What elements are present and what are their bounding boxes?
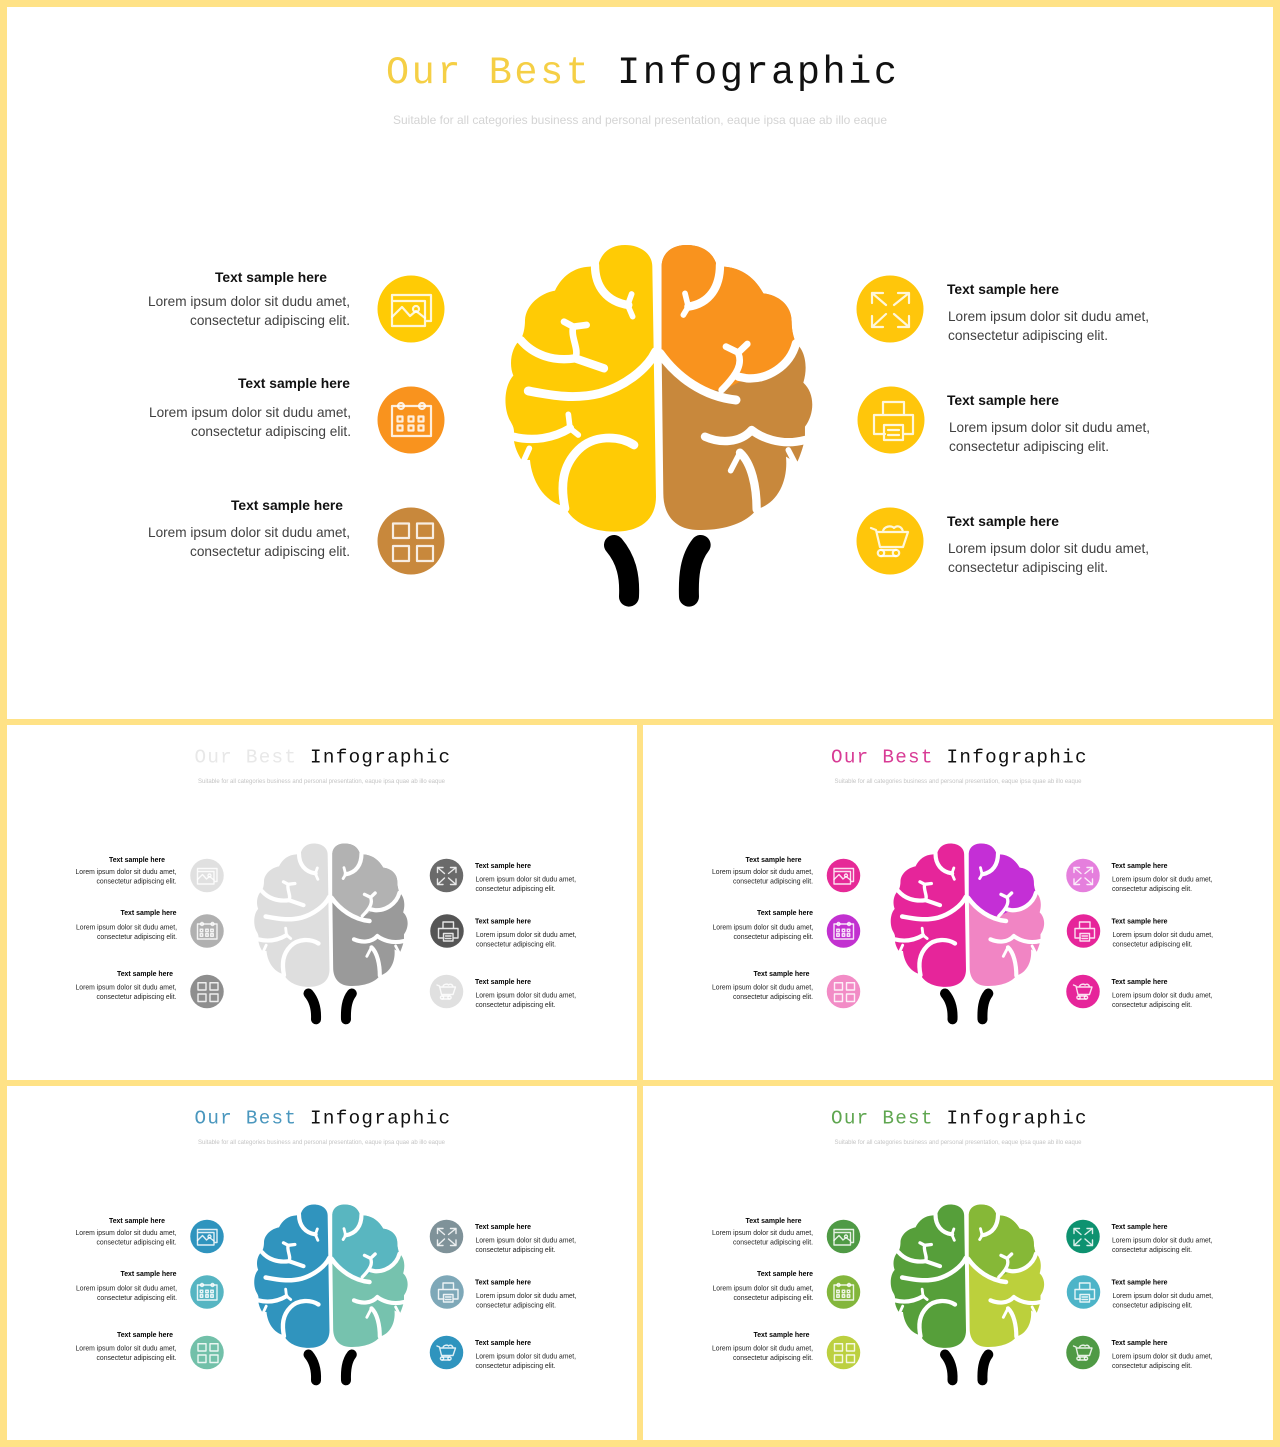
text block: right 1: Lorem ipsum dolor sit dudu amet, — [1112, 876, 1213, 884]
text block: right 1: consectetur adipiscing elit. — [1112, 886, 1192, 893]
text block: left 1: consectetur adipiscing elit. — [733, 878, 813, 886]
text block: right 2: Text sample here — [1112, 1280, 1168, 1286]
text block: right 3: Text sample here — [1112, 979, 1168, 986]
text block: right 1: consectetur adipiscing elit. — [1112, 1247, 1192, 1254]
text block: right 2: Lorem ipsum dolor sit dudu amet, — [1112, 932, 1213, 939]
icon: printer — [858, 386, 924, 454]
text block: left 1 — [712, 857, 813, 886]
icon: cart — [856, 508, 924, 574]
icon: cart — [1066, 1336, 1100, 1369]
text block: left 3: Lorem ipsum dolor sit dudu amet, — [712, 1346, 813, 1352]
brain illustration — [254, 1204, 408, 1380]
text block: left 3: consectetur adipiscing elit. — [733, 994, 813, 1001]
panel: blue slide — [7, 1086, 637, 1440]
text block: right 3: consectetur adipiscing elit. — [1112, 1002, 1192, 1009]
text block: left 1: Lorem ipsum dolor sit dudu amet, — [76, 1230, 177, 1237]
icon: cart — [430, 1336, 463, 1369]
text block: left 3: Lorem ipsum dolor sit dudu amet, — [76, 984, 177, 992]
text block: right 3 — [475, 979, 576, 1009]
text block: right 2 — [475, 918, 577, 948]
text block: right 3: consectetur adipiscing elit. — [476, 1363, 556, 1370]
text block: right 1: Lorem ipsum dolor sit dudu amet, — [1112, 1238, 1213, 1244]
icon: image — [190, 1220, 224, 1253]
text block: left 2 — [76, 910, 177, 941]
brain illustration — [891, 1204, 1044, 1380]
text block: right 2: Text sample here — [947, 392, 1059, 408]
subtitle: Suitable for all categories business and personal presentation, eaque ipsa quae ab illo eaque — [393, 113, 887, 127]
text block: right 3: Lorem ipsum dolor sit dudu amet, — [948, 540, 1149, 556]
text block: right 2: consectetur adipiscing elit. — [476, 942, 556, 948]
icon: calendar — [378, 386, 444, 454]
title: Our Best Infographic — [194, 1108, 450, 1130]
text block: right 1: Text sample here — [1112, 1224, 1168, 1231]
text block: left 1: Text sample here — [746, 1218, 802, 1225]
text block: left 3: consectetur adipiscing elit. — [733, 1355, 813, 1362]
text block: left 3: consectetur adipiscing elit. — [96, 994, 177, 1001]
icon: image — [827, 1220, 860, 1253]
text block: right 3: Text sample here — [475, 979, 531, 986]
subtitle: Suitable for all categories business and personal presentation, eaque ipsa quae ab illo eaque — [834, 779, 1082, 785]
text block: left 2: Text sample here — [757, 910, 813, 917]
brain illustration — [891, 843, 1044, 1019]
text block: left 3 — [148, 497, 350, 559]
brain illustration — [254, 843, 408, 1019]
text block: left 3: consectetur adipiscing elit. — [190, 543, 350, 559]
text block: right 1: Text sample here — [475, 1224, 531, 1231]
text block: right 2: Text sample here — [1112, 918, 1168, 926]
icon: image — [378, 276, 444, 342]
text block: left 3 — [712, 971, 813, 1001]
panel: pink slide — [643, 725, 1273, 1080]
icon: grid — [190, 1336, 224, 1369]
icon: calendar — [827, 1275, 860, 1309]
text block: right 2: consectetur adipiscing elit. — [949, 438, 1109, 454]
text block: left 2: consectetur adipiscing elit. — [191, 423, 351, 439]
text block: right 3: Lorem ipsum dolor sit dudu amet, — [476, 992, 576, 1000]
text block: right 1: consectetur adipiscing elit. — [948, 327, 1108, 343]
title: Our Best Infographic — [194, 746, 450, 768]
subtitle: Suitable for all categories business and personal presentation, eaque ipsa quae ab illo eaque — [198, 1140, 446, 1146]
text block: left 2: consectetur adipiscing elit. — [97, 934, 177, 941]
text block: left 3: Text sample here — [754, 1332, 810, 1339]
icon: calendar — [190, 914, 224, 948]
text block: left 1: Text sample here — [109, 857, 165, 864]
icon: cart — [1066, 975, 1100, 1008]
text block: left 3: Lorem ipsum dolor sit dudu amet, — [712, 984, 813, 992]
text block: right 2: Lorem ipsum dolor sit dudu amet, — [949, 419, 1150, 435]
icon: grid — [378, 508, 444, 574]
text block: left 3: Lorem ipsum dolor sit dudu amet, — [76, 1346, 177, 1352]
text block: left 1: Lorem ipsum dolor sit dudu amet, — [76, 869, 177, 876]
text block: left 3: Text sample here — [754, 971, 810, 978]
text block: left 2: Lorem ipsum dolor sit dudu amet, — [712, 1286, 814, 1292]
icon: expand — [430, 859, 463, 892]
panel: green slide — [643, 1086, 1273, 1440]
text block: right 1: Lorem ipsum dolor sit dudu amet, — [948, 308, 1149, 324]
text block: left 2 — [712, 1271, 814, 1302]
icon: image — [827, 859, 860, 892]
text block: right 1 — [1112, 863, 1213, 893]
text block: left 2: consectetur adipiscing elit. — [97, 1295, 177, 1302]
icon: printer — [1067, 914, 1100, 948]
text block: right 3: Lorem ipsum dolor sit dudu amet, — [476, 1354, 576, 1360]
icon: grid — [827, 975, 860, 1008]
text block: left 3 — [76, 1332, 177, 1362]
text block: left 1: Lorem ipsum dolor sit dudu amet, — [148, 293, 350, 309]
panel: main yellow slide — [7, 7, 1273, 719]
text block: right 2 — [1112, 1280, 1213, 1310]
text block: right 3: Text sample here — [947, 513, 1059, 529]
title: Our Best Infographic — [831, 746, 1086, 768]
text block: left 1: consectetur adipiscing elit. — [733, 1240, 813, 1246]
text block: left 3: consectetur adipiscing elit. — [96, 1355, 177, 1362]
text block: left 2: Lorem ipsum dolor sit dudu amet, — [76, 1286, 177, 1292]
text block: left 1: Text sample here — [746, 857, 802, 864]
title: Our Best Infographic — [386, 51, 897, 95]
text block: right 3 — [1112, 979, 1213, 1009]
subtitle: Suitable for all categories business and personal presentation, eaque ipsa quae ab illo eaque — [834, 1140, 1082, 1146]
text block: left 2: Text sample here — [757, 1271, 813, 1278]
text block: right 2: consectetur adipiscing elit. — [1112, 1302, 1193, 1310]
text block: left 3: Text sample here — [231, 497, 343, 513]
text block: right 1: consectetur adipiscing elit. — [476, 1247, 556, 1254]
icon: printer — [430, 914, 464, 948]
text block: right 2: Text sample here — [475, 1280, 531, 1286]
text block: right 2: consectetur adipiscing elit. — [476, 1302, 556, 1310]
subtitle: Suitable for all categories business and personal presentation, eaque ipsa quae ab illo eaque — [198, 779, 446, 785]
text block: left 2: consectetur adipiscing elit. — [734, 1295, 814, 1302]
text block: left 1: consectetur adipiscing elit. — [96, 878, 177, 886]
text block: right 2: consectetur adipiscing elit. — [1112, 942, 1193, 948]
icon: cart — [430, 975, 463, 1008]
text block: right 2 — [1112, 918, 1213, 948]
icon: image — [190, 859, 224, 892]
text block: right 3 — [947, 513, 1149, 575]
text block: right 3: Lorem ipsum dolor sit dudu amet, — [1112, 1354, 1213, 1360]
text block: right 3: consectetur adipiscing elit. — [476, 1002, 556, 1009]
text block: right 2: Lorem ipsum dolor sit dudu amet, — [476, 1293, 577, 1300]
text block: left 1: consectetur adipiscing elit. — [96, 1240, 177, 1246]
text block: left 1: Text sample here — [215, 269, 327, 285]
icon: expand — [856, 276, 924, 342]
icon: calendar — [827, 914, 860, 948]
text block: left 2: Text sample here — [120, 1271, 177, 1278]
text block: left 1 — [76, 1218, 177, 1246]
icon: grid — [190, 975, 224, 1008]
text block: right 1 — [475, 1224, 576, 1254]
text block: left 3: Lorem ipsum dolor sit dudu amet, — [148, 524, 350, 540]
text block: left 3 — [712, 1332, 813, 1362]
text block: right 1 — [475, 863, 576, 893]
text block: left 2 — [712, 910, 814, 941]
icon: printer — [1067, 1275, 1100, 1309]
text block: left 2 — [149, 375, 351, 439]
text block: right 1: Text sample here — [1112, 863, 1168, 870]
icon: expand — [1066, 859, 1100, 892]
text block: left 2: Text sample here — [238, 375, 350, 391]
text block: left 2: Lorem ipsum dolor sit dudu amet, — [76, 924, 177, 932]
text block: right 2: Lorem ipsum dolor sit dudu amet, — [1112, 1293, 1213, 1300]
text block: right 2: Lorem ipsum dolor sit dudu amet, — [476, 932, 577, 939]
icon: grid — [827, 1336, 860, 1369]
text block: left 2: Lorem ipsum dolor sit dudu amet, — [149, 404, 351, 420]
text block: left 1 — [148, 269, 350, 328]
text block: left 1: consectetur adipiscing elit. — [190, 312, 350, 328]
icon: expand — [1066, 1220, 1100, 1253]
brain illustration — [505, 245, 812, 597]
text block: right 1 — [1112, 1224, 1213, 1254]
text block: right 1: Lorem ipsum dolor sit dudu amet, — [476, 876, 576, 884]
text block: right 3: consectetur adipiscing elit. — [948, 559, 1108, 575]
text block: right 1: Text sample here — [475, 863, 531, 870]
text block: left 3 — [76, 971, 177, 1001]
text block: right 3 — [1112, 1340, 1213, 1370]
text block: left 2: Lorem ipsum dolor sit dudu amet, — [712, 924, 814, 932]
text block: right 3: Lorem ipsum dolor sit dudu amet, — [1112, 992, 1213, 1000]
text block: right 3: Text sample here — [475, 1340, 531, 1347]
text block: left 2: Text sample here — [120, 910, 177, 917]
text block: left 1 — [76, 857, 177, 886]
icon: printer — [430, 1275, 464, 1309]
text block: right 3: consectetur adipiscing elit. — [1112, 1363, 1192, 1370]
text block: left 3: Text sample here — [117, 971, 173, 978]
text block: left 3: Text sample here — [117, 1332, 173, 1339]
text block: right 1: Lorem ipsum dolor sit dudu amet, — [476, 1238, 576, 1244]
icon: calendar — [190, 1275, 224, 1309]
text block: left 1: Lorem ipsum dolor sit dudu amet, — [712, 869, 813, 876]
text block: right 2: Text sample here — [475, 918, 531, 926]
text block: right 2 — [947, 392, 1150, 454]
text block: left 2 — [76, 1271, 177, 1302]
text block: right 1 — [947, 281, 1149, 343]
panel: gray slide — [7, 725, 637, 1080]
text block: right 2 — [475, 1280, 577, 1310]
title: Our Best Infographic — [831, 1108, 1086, 1130]
text block: left 1: Lorem ipsum dolor sit dudu amet, — [712, 1230, 813, 1237]
text block: right 1: Text sample here — [947, 281, 1059, 297]
text block: right 3 — [475, 1340, 576, 1370]
text block: left 1 — [712, 1218, 813, 1246]
text block: right 1: consectetur adipiscing elit. — [476, 886, 556, 893]
text block: left 1: Text sample here — [109, 1218, 165, 1225]
text block: right 3: Text sample here — [1112, 1340, 1168, 1347]
icon: expand — [430, 1220, 463, 1253]
text block: left 2: consectetur adipiscing elit. — [734, 934, 814, 941]
